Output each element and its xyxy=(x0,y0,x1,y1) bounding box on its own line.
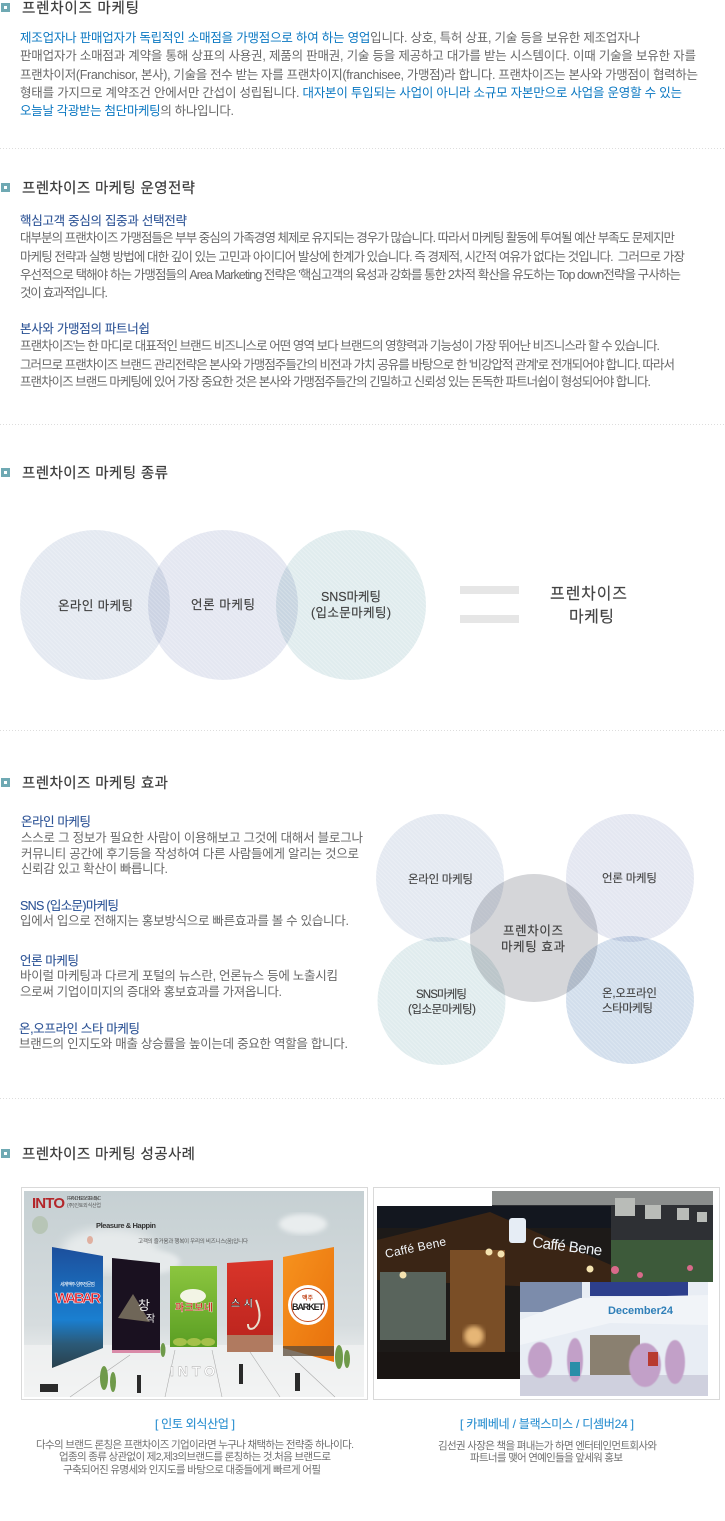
chart: five overlapping circles: 언론 마케팅 xyxy=(602,872,657,885)
caption: Caffe Bene: [ 카페베네 / 블랙스미스 / 디셈버24 ] xyxy=(460,1417,634,1431)
text block: core customer strategy: 우선적으로 택해야 하는 가맹점들의 Area Marketing 전략은 '핵심고객의 육성과 강화를 통한 2차적 확산을 유도하는 Top down전략을 구사하는 xyxy=(20,267,681,282)
text block: definition: 제조업자나 판매업자가 독립적인 소매점을 가맹점으로 하여 하는 영업입니다. 상호, 특허 상표, 기술 등을 보유한 제조업자나 xyxy=(20,31,640,45)
chart: five overlapping circles: 마케팅 효과 xyxy=(501,940,565,954)
poster: green: 파크보네 xyxy=(175,1301,213,1314)
heading: section 1: 프렌차이즈 마케팅 xyxy=(22,0,139,17)
poster: WABAR: WABAR xyxy=(55,1290,101,1307)
text block: press marketing: 으로써 기업이미지의 증대와 홍보효과를 가져옵니다. xyxy=(20,985,282,999)
chart: five overlapping circles xyxy=(376,814,694,1065)
poster: BARKET: BARKET xyxy=(292,1302,324,1312)
image panel: INTO franchise brands: (주)인토외식산업 xyxy=(67,1202,101,1209)
panel: section 4 effects xyxy=(1,775,694,1065)
chart: three overlapping circles xyxy=(20,530,426,680)
text block: online marketing: 온라인 마케팅 xyxy=(21,815,91,829)
chart: five overlapping circles: (입소문마케팅) xyxy=(408,1003,476,1016)
text block: definition xyxy=(20,31,698,118)
panel: section 3 types xyxy=(1,465,627,680)
poster: WABAR: 세계맥주 · 양주전문점 xyxy=(60,1281,95,1288)
icon: section 4 bullet xyxy=(1,778,10,787)
panel: section 5 success cases xyxy=(1,1146,720,1476)
text block: press marketing: 언론 마케팅 xyxy=(20,954,79,968)
text block: online marketing: 커뮤니티 공간에 후기등을 작성하여 다른 사람들에게 알리는 것으로 xyxy=(21,847,359,861)
caption: Caffe Bene: 김선권 사장은 책을 펴내는가 하면 엔터테인먼트회사와 xyxy=(438,1439,657,1452)
caption: INTO: 구축되어진 유명세와 인지도를 바탕으로 대중들에게 빠르게 어필 xyxy=(63,1464,321,1476)
poster: hanja: 창 xyxy=(138,1298,150,1313)
icon: section 3 bullet xyxy=(1,468,10,477)
text block: press marketing: 바이럴 마케팅과 다르게 포털의 뉴스란, 언론뉴스 등에 노출시킴 xyxy=(20,969,338,983)
text block: online marketing: 신뢰감 있고 확산이 빠릅니다. xyxy=(21,862,168,876)
text block: press marketing xyxy=(20,954,338,999)
text block: partnership: 본사와 가맹점의 파트너쉽 xyxy=(20,322,150,336)
chart: five overlapping circles: SNS마케팅 xyxy=(416,988,467,1001)
text block: online marketing: 스스로 그 정보가 필요한 사람이 이용해보고 그것에 대해서 블로그나 xyxy=(21,831,363,845)
text block: result label: 마케팅 xyxy=(569,608,614,626)
chart: three overlapping circles: (입소문마케팅) xyxy=(311,606,391,620)
poster: hanja: 작 xyxy=(146,1313,155,1325)
caption: INTO xyxy=(36,1417,354,1476)
caption: Caffe Bene: 파트너를 맺어 연예인들을 앞세워 홍보 xyxy=(470,1451,623,1464)
heading: section 2: 프렌차이즈 마케팅 운영전략 xyxy=(22,180,195,197)
text block: SNS marketing: 입에서 입으로 전해지는 홍보방식으로 빠른효과를 볼 수 있습니다. xyxy=(20,914,349,928)
text block: star marketing xyxy=(19,1022,348,1051)
image panel: INTO franchise brands: FRANCHISE SYSTEMS,INC xyxy=(67,1196,101,1202)
text block: core customer strategy: 것이 효과적입니다. xyxy=(20,286,108,300)
chart: five overlapping circles: 스타마케팅 xyxy=(602,1002,653,1015)
text block: star marketing: 온,오프라인 스타 마케팅 xyxy=(19,1022,140,1036)
heading: section 4: 프렌차이즈 마케팅 효과 xyxy=(22,775,168,792)
text block: definition: 판매업자가 소매점과 계약을 통해 상표의 사용권, 제품의 판매권, 기술 등을 제공하고 대가를 받는 시스템이다. 이때 기술을 보유한 자를 xyxy=(20,48,696,63)
chart: five overlapping circles: 프렌차이즈 xyxy=(503,924,563,938)
poster: BARKET xyxy=(283,1247,334,1362)
poster: red: 스시 xyxy=(231,1298,253,1310)
text block: partnership: 그러므로 프랜차이즈 브랜드 관리전략은 본사와 가맹점주들간의 비전과 가치 공유를 바탕으로 한 '비강압적 관계'로 전개되어야 합니다. 따라서 xyxy=(20,358,675,372)
heading: section 5: 프렌차이즈 마케팅 성공사례 xyxy=(22,1146,195,1163)
text block: SNS marketing: SNS (입소문)마케팅 xyxy=(20,899,119,913)
image panel: Caffe Bene and December24 xyxy=(374,1188,720,1400)
panel: section 2 strategy xyxy=(1,180,685,389)
icon: section 5 bullet xyxy=(1,1149,10,1158)
image panel: Caffe Bene and December24: Caffé Bene xyxy=(384,1234,448,1261)
image panel: INTO franchise brands: Pleasure & Happin xyxy=(96,1221,156,1230)
caption: INTO: 업종의 종류 상관없이 제2,제3의브랜드를 론칭하는 것.처음 브랜드로 xyxy=(59,1450,331,1463)
chart: five overlapping circles: 온라인 마케팅 xyxy=(408,873,473,886)
poster: hanja xyxy=(112,1258,160,1353)
image panel: INTO franchise brands: INTO xyxy=(32,1195,65,1212)
chart: three overlapping circles: SNS마케팅 xyxy=(321,590,381,604)
text block: SNS marketing xyxy=(20,899,349,928)
text block: core customer strategy: 대부분의 프랜차이즈 가맹점들은 부부 중심의 가족경영 체제로 유지되는 경우가 많습니다. 따라서 마케팅 활동에 투여될 예산 부족도 문제지만 xyxy=(20,231,675,245)
icon: equals sign xyxy=(460,586,519,623)
image panel: INTO franchise brands: 고객의 즐거움과 행복이 우리의 비즈니스(꿈)입니다 xyxy=(138,1237,248,1245)
text block: core customer strategy xyxy=(20,213,685,300)
text block: core customer strategy: 마케팅 전략과 실행 방법에 대한 깊이 있는 고민과 아이디어 발상에 한계가 있습니다. 즉 경제적, 시간적 여유가 없다는 것입니다. 그러므로 가장 xyxy=(20,249,685,264)
text block: partnership: 프랜차이즈'는 한 마디로 대표적인 브랜드 비즈니스로 어떤 영역 보다 브랜드의 영향력과 기능성이 가장 뛰어난 비즈니스라 할 수 있습니다. xyxy=(20,339,660,353)
text block: definition: 프랜차이저(Franchisor, 본사), 기술을 전수 받는 자를 프랜차이지(franchisee, 가맹점)라 합니다. 프랜차이즈는 본사와 가맹점이 협력하는 xyxy=(20,68,698,82)
text block: star marketing: 브랜드의 인지도와 매출 상승률을 높이는데 중요한 역할을 합니다. xyxy=(19,1037,348,1051)
text block: result label xyxy=(550,585,627,626)
poster: WABAR xyxy=(52,1247,103,1368)
decorative figures xyxy=(40,1364,300,1393)
text block: result label: 프렌차이즈 xyxy=(550,585,627,603)
poster: BARKET: 맥주 xyxy=(302,1294,314,1302)
caption: Caffe Bene xyxy=(438,1417,657,1464)
image panel: INTO franchise brands: INTO xyxy=(170,1363,215,1379)
poster: green xyxy=(170,1266,217,1347)
text block: definition: 형태를 가지므로 계약조건 안에서만 간섭이 성립됩니다. 대자본이 투입되는 사업이 아니라 소규모 자본만으로 사업을 운영할 수 있는 xyxy=(20,85,682,100)
image panel: Caffe Bene and December24: December24 xyxy=(608,1305,674,1317)
chart: five overlapping circles: 온,오프라인 xyxy=(602,987,657,1000)
panel: section 1 introduction xyxy=(1,0,698,118)
chart: three overlapping circles: 온라인 마케팅 xyxy=(58,599,133,613)
chart: three overlapping circles: 언론 마케팅 xyxy=(191,598,255,612)
poster: red xyxy=(227,1260,273,1352)
image panel: Caffe Bene and December24: Caffé Bene xyxy=(532,1234,603,1260)
text block: definition: 오늘날 각광받는 첨단마케팅의 하나입니다. xyxy=(20,104,234,118)
caption: INTO: 다수의 브랜드 론칭은 프랜차이즈 기업이라면 누구나 채택하는 전략중 하나이다. xyxy=(36,1438,354,1451)
text block: online marketing xyxy=(21,815,363,876)
text block: partnership xyxy=(20,322,675,389)
text block: core customer strategy: 핵심고객 중심의 집중과 선택전략 xyxy=(20,213,187,228)
image panel: INTO franchise brands xyxy=(22,1188,368,1400)
icon: section 2 bullet xyxy=(1,183,10,192)
heading: section 3: 프렌차이즈 마케팅 종류 xyxy=(22,465,168,482)
icon: section 1 bullet xyxy=(1,3,10,12)
text block: partnership: 프랜차이즈 브랜드 마케팅에 있어 가장 중요한 것은 본사와 가맹점주들간의 긴밀하고 신뢰성 있는 돈독한 파트너쉽이 형성되어야 합니다. xyxy=(20,375,651,389)
caption: INTO: [ 인토 외식산업 ] xyxy=(155,1417,235,1431)
